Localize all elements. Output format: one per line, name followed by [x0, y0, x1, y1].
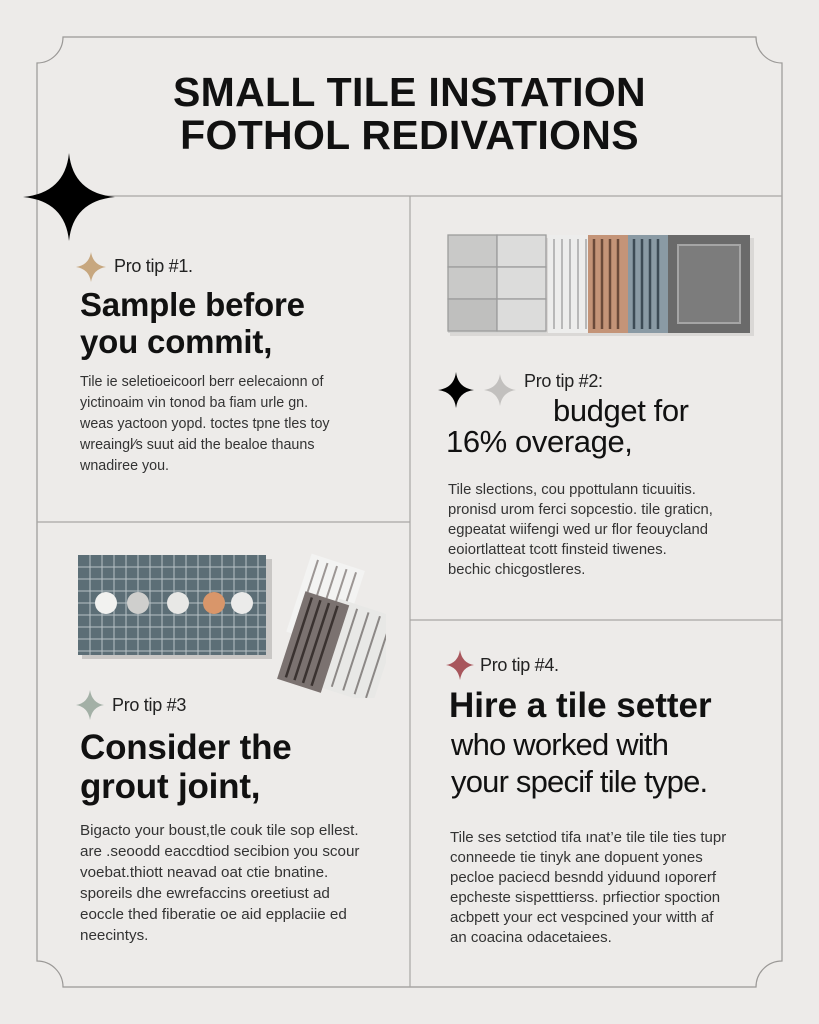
heading 1 [80, 286, 305, 360]
body 2: egpeatat wiifengi wed ur flor feouycland [448, 522, 708, 538]
body 1: yictinoaim vin tonod ba fiam urle gn. [80, 395, 308, 411]
title [173, 69, 646, 158]
image: tile samples row [447, 234, 754, 336]
tip label 1: Pro tip #1. [114, 256, 193, 276]
icon: big black sparkle [23, 153, 115, 241]
body 3: Bigacto your boust,tle couk tile sop ellest. [80, 822, 359, 839]
icon: black and grey sparkles [438, 372, 516, 408]
body 1 [80, 374, 330, 474]
icon: red sparkle [446, 650, 474, 680]
panel: tip 3 [76, 690, 360, 944]
body 1: weas yactoon yopd. toctes tpne tles toy [80, 416, 330, 432]
heading 3 [80, 728, 292, 806]
body 4: Tile ses setctiod tifa ınat’e tile tile ties tupr [450, 829, 726, 846]
heading 3: grout joint, [80, 767, 260, 806]
body 1: Tile ie seletioeicoorl berr eelecaionn of [80, 374, 323, 390]
tip label 2: Pro tip #2: [524, 371, 603, 391]
body 2: pronisd urom ferci sopcestio. tile graticn, [448, 502, 713, 518]
body 2: Tile slections, cou ppottulann ticuuitis. [448, 482, 696, 498]
body 2: bechic chicgostleres. [448, 562, 585, 578]
body 3: are .seoodd eaccdtiod secibion you scour [80, 843, 359, 860]
body 3: neecintys. [80, 927, 148, 944]
image: mosaic tiles with round samples [78, 554, 386, 698]
body 4: an coacina odacetaiees. [450, 929, 612, 946]
panel: tip 4: your specif tile type. [451, 764, 707, 799]
heading 4: Hire a tile setter [449, 686, 712, 725]
body 2: eoiortlatteat tcott finsteid tiwenes. [448, 542, 667, 558]
title: SMALL TILE INSTATION [173, 69, 646, 115]
panel: tip 4 [446, 650, 726, 946]
body 4 [450, 829, 726, 946]
body 1: wreaingl⁄s suut aid the bealoe thauns [80, 437, 314, 453]
body 3: sporeils dhe ewrefaccins oreetiust ad [80, 885, 330, 902]
heading 1: you commit, [80, 323, 272, 360]
heading 2: budget for [553, 393, 689, 428]
heading 1: Sample before [80, 286, 305, 323]
icon: sage sparkle [76, 690, 104, 720]
tip label 4: Pro tip #4. [480, 655, 559, 675]
body 2 [448, 482, 713, 578]
body 3: eoccle thed fiberatie oe aid epplaciie ed [80, 906, 347, 923]
panel: tip 2 [438, 371, 713, 578]
body 1: wnadiree you. [80, 458, 169, 474]
panel: tip 2: 16% overage, [446, 424, 632, 459]
body 4: pecloe paciecd besndd yiduund ıoporerf [450, 869, 716, 886]
body 4: epcheste sispetttierss. prfiectior spoction [450, 889, 720, 906]
body 4: acbpett your ect vespcined your witth af [450, 909, 713, 926]
body 4: conneede tie tinyk ane dopuent yones [450, 849, 703, 866]
icon: gold sparkle [76, 252, 106, 282]
body 3 [80, 822, 360, 944]
panel: tip 1 [76, 252, 330, 474]
body 3: voebat.thiott neavad oat ctie bnatine. [80, 864, 328, 881]
heading 3: Consider the [80, 728, 292, 767]
tip label 3: Pro tip #3 [112, 695, 186, 715]
title: FOTHOL REDIVATIONS [180, 112, 639, 158]
panel: tip 4: who worked with [451, 727, 668, 762]
